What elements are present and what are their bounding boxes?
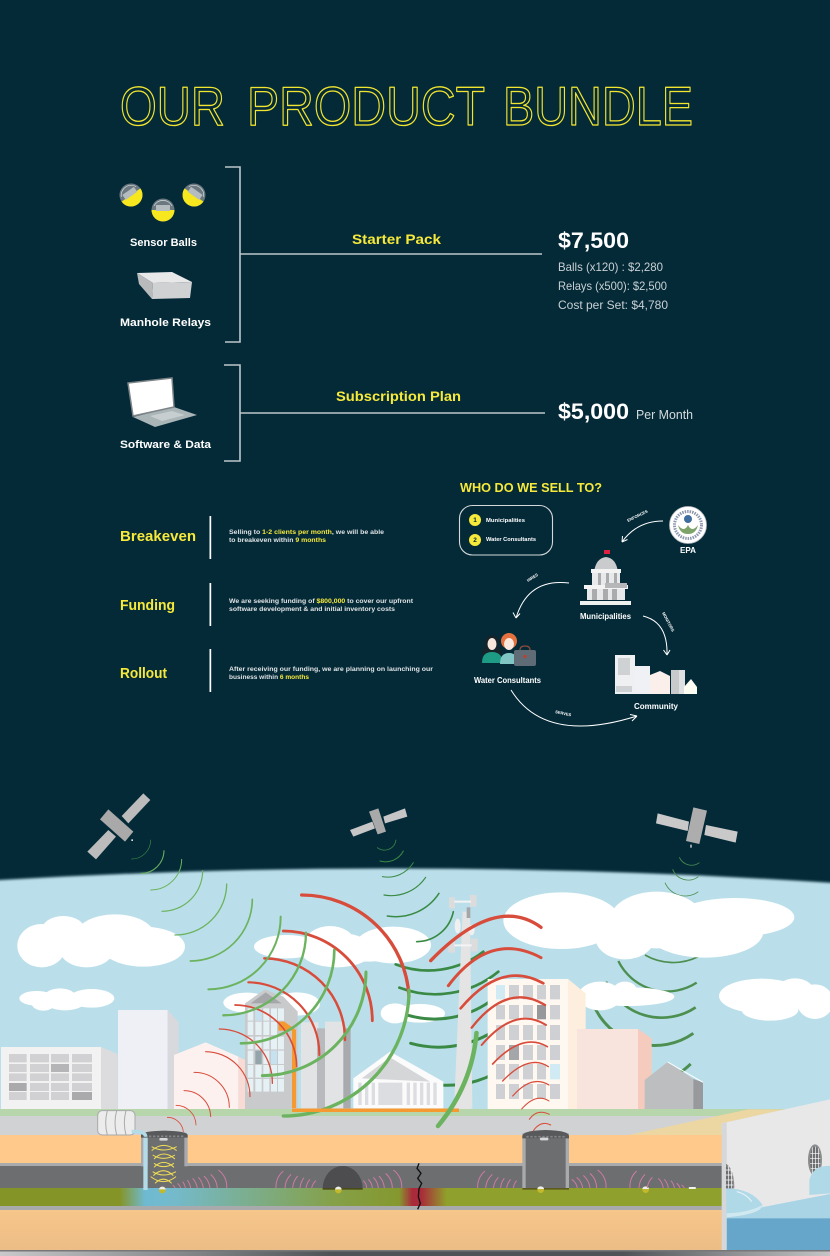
pipe crack: [417, 1163, 422, 1209]
orange frame base: [292, 1108, 459, 1112]
heading: subscription plan: Subscription Plan: [336, 388, 461, 404]
label: community: Community: [634, 702, 679, 711]
outfall grate: [726, 1164, 734, 1188]
red signal arcs: tower and right manhole: [431, 916, 551, 1131]
text: breakeven: Selling to 1-2 clients per month , we will be able: [229, 530, 385, 536]
icon: satellite right: [656, 807, 738, 848]
sensor ball: [642, 1186, 649, 1193]
outfall and river: [628, 1099, 830, 1250]
red signal arcs: left: [167, 895, 409, 1132]
icon: manhole relay: [137, 272, 192, 299]
sensor ball surface: [689, 1187, 696, 1189]
title: [120, 75, 693, 137]
heading: breakeven: Breakeven: [120, 528, 196, 545]
text: rollout: After receiving our funding, we are planning on launching our: [229, 667, 434, 673]
legend: [460, 506, 552, 555]
icon: water consultants: [482, 633, 536, 666]
panel: starter pack bundle: [115, 167, 668, 342]
cell tower: [448, 895, 478, 1110]
building: office block: [1, 1047, 118, 1109]
arrow: monitors: [643, 611, 676, 655]
text: rollout: business within 6 months: [229, 675, 310, 681]
price: starter pack: [558, 228, 668, 312]
text: breakeven: [229, 530, 385, 544]
divider line: [210, 649, 211, 692]
icon: municipal building: [580, 550, 631, 605]
building: white hall: [353, 1052, 443, 1108]
price: starter pack: Cost per Set: $4,780: [558, 298, 668, 312]
manhole right: [417, 1130, 696, 1209]
ultrasonic waves: [151, 1145, 177, 1183]
cloud group: right side: [503, 892, 830, 1021]
road: [0, 1116, 830, 1135]
panel: breakeven: [120, 516, 385, 559]
panel: rollout: [120, 649, 434, 692]
arrow: serves: SERVES: [555, 709, 572, 717]
divider line: [210, 516, 211, 559]
building: apartment block: [488, 979, 586, 1109]
price: starter pack: $7,500: [558, 228, 629, 253]
label: manhole relays: Manhole Relays: [120, 317, 211, 329]
title: OUR: [120, 75, 225, 137]
building: grey house: [645, 1062, 703, 1109]
price: starter pack: Relays (x500): $2,500: [558, 279, 667, 293]
river: [727, 1190, 830, 1250]
left buildings: [1, 989, 443, 1109]
icon: satellite middle: [350, 808, 407, 837]
clouds: [17, 892, 830, 1023]
sand: [628, 1109, 785, 1135]
heading: rollout: Rollout: [120, 665, 167, 682]
panel: who do we sell to: [460, 480, 706, 726]
distant outfall: [808, 1144, 830, 1195]
label: EPA: EPA: [680, 545, 696, 555]
icon: sensor balls: [115, 179, 210, 222]
arrow: enforces: ENFORCES: [626, 509, 649, 523]
price: subscription: [558, 399, 693, 424]
green signal arc: foreground: [438, 1033, 476, 1126]
divider line: [210, 583, 211, 626]
legend: 1: [473, 517, 477, 524]
text: rollout: [229, 667, 434, 681]
arrow: enforces: [622, 509, 663, 542]
bracket: starter pack: [225, 167, 542, 342]
shaft: [522, 1133, 569, 1190]
price: subscription: $5,000: [558, 399, 629, 424]
heading: starter pack: Starter Pack: [352, 231, 441, 247]
building: twin blocks: [278, 1022, 351, 1108]
title: BUNDLE: [503, 75, 693, 137]
arrow: monitors: MONITORS: [661, 611, 676, 633]
title: PRODUCT: [247, 75, 485, 137]
text: funding: software development & and initial inventory costs: [229, 607, 396, 613]
green signal arcs: left satellite: [132, 840, 409, 1116]
building: tall tower: [118, 1010, 179, 1109]
sky: [0, 868, 830, 1256]
arrow: serves: [511, 690, 637, 726]
pink sonar arcs: [478, 1170, 684, 1188]
soil upper: [0, 1135, 726, 1163]
building: pink house: [174, 1042, 245, 1109]
legend: Municipalities: [486, 518, 525, 524]
bracket: subscription: [224, 365, 545, 461]
panel: subscription plan: [120, 365, 693, 461]
lid: [141, 1131, 188, 1141]
label: sensor balls: Sensor Balls: [130, 237, 197, 249]
green verge: [0, 1109, 830, 1116]
right buildings: [448, 895, 703, 1110]
sensor ball: [537, 1186, 544, 1193]
sewer pipe: [0, 1163, 726, 1210]
signal arcs: middle satellite: [377, 840, 510, 1085]
embankment edge: [722, 1122, 727, 1250]
arrow: hires: [513, 572, 569, 618]
sensor ball: [159, 1187, 166, 1193]
manhole left: [98, 1111, 402, 1193]
icon: laptop: [128, 378, 197, 427]
floor strip: [0, 1250, 830, 1256]
icon: community: [615, 655, 697, 694]
sensor ball: [335, 1187, 342, 1193]
text: breakeven: to breakeven within 9 months: [229, 538, 327, 544]
signal arcs: third satellite: [593, 857, 699, 1082]
label: municipalities: Municipalities: [580, 612, 632, 621]
white embankment: [722, 1099, 830, 1217]
pink sonar arcs: [173, 1170, 402, 1188]
shaft: [141, 1133, 188, 1190]
text: funding: We are seeking funding of $800,000 to cover our upfront: [229, 599, 413, 605]
ground layers: [0, 1109, 830, 1256]
icon: EPA seal: [670, 506, 706, 544]
label: software and data: Software & Data: [120, 439, 212, 451]
soil lower: [0, 1210, 722, 1250]
dome: [323, 1166, 363, 1190]
legend: Water Consultants: [486, 537, 536, 543]
label: water consultants: Water Consultants: [474, 676, 542, 685]
cloud group: left side: [17, 914, 445, 1023]
building: pink block: [577, 1029, 652, 1109]
price: subscription: Per Month: [636, 408, 693, 422]
water dome: [726, 1188, 763, 1217]
text: funding: [229, 599, 413, 613]
heading: funding: Funding: [120, 597, 175, 614]
legend: 2: [473, 537, 477, 544]
road tube: [98, 1111, 146, 1137]
heading: who do we sell to: WHO DO WE SELL TO?: [460, 480, 602, 495]
building: glass tower: [245, 989, 298, 1109]
arrow: hires: HIRES: [526, 572, 539, 583]
price: starter pack: Balls (x120) : $2,280: [558, 260, 663, 274]
panel: funding: [120, 583, 413, 626]
lid: [522, 1130, 569, 1140]
icon: satellite left: [87, 793, 150, 859]
